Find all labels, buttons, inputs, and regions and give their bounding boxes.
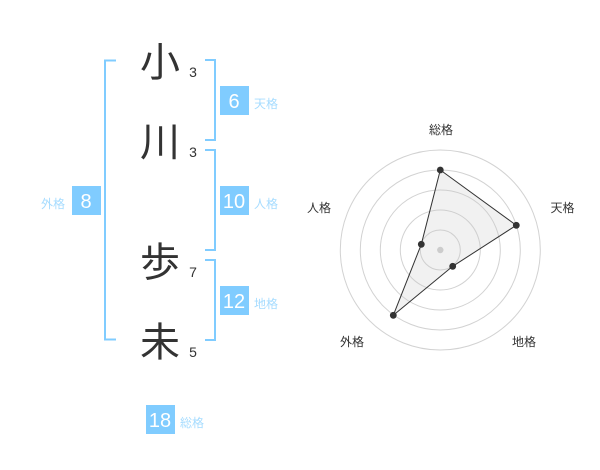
- character: 歩: 7: [189, 264, 197, 280]
- radar labels: [307, 122, 575, 349]
- character: 小: 3: [189, 64, 197, 80]
- bracket: heaven: [205, 60, 215, 140]
- score: 人格 10: 人格: [254, 196, 278, 211]
- name characters: [140, 41, 197, 365]
- bracket: person: [205, 150, 215, 250]
- character: 川: 3: [189, 144, 197, 160]
- radar labels: 天格: [550, 200, 575, 215]
- character: 未: 5: [189, 344, 197, 360]
- score: 地格 12: [220, 286, 278, 315]
- score: 外格 8: 外格: [41, 196, 65, 211]
- character: 小: 小: [140, 41, 180, 85]
- radar data polygon: [393, 170, 516, 315]
- radar labels: 外格: [340, 334, 364, 349]
- score: 外格 8: [41, 186, 101, 215]
- radar chart: [307, 122, 575, 350]
- radar labels: 地格: [512, 334, 536, 349]
- character: 未: 未: [140, 321, 180, 365]
- score: 地格 12: 12: [223, 291, 245, 313]
- score: 外格 8: 8: [80, 191, 92, 213]
- score: 天格 6: [220, 86, 278, 115]
- score: 総格 18: [146, 405, 204, 434]
- score: 地格 12: 地格: [254, 296, 278, 311]
- score: 総格 18: 18: [149, 410, 171, 432]
- score: 人格 10: 10: [223, 191, 245, 213]
- radar data points: [390, 167, 520, 319]
- radar center dot: [437, 247, 443, 253]
- radar grid rings: [340, 150, 540, 350]
- score: 総格 18: 総格: [180, 415, 204, 430]
- radar labels: 総格: [429, 122, 453, 137]
- character: 川: 川: [140, 121, 180, 165]
- bracket: earth: [205, 260, 215, 340]
- radar labels: 人格: [307, 200, 331, 215]
- score: 人格 10: [220, 186, 278, 215]
- score: 天格 6: 天格: [254, 96, 278, 111]
- score: 天格 6: 6: [228, 91, 240, 113]
- bracket: outer: [105, 60, 116, 340]
- character: 歩: 歩: [140, 241, 180, 285]
